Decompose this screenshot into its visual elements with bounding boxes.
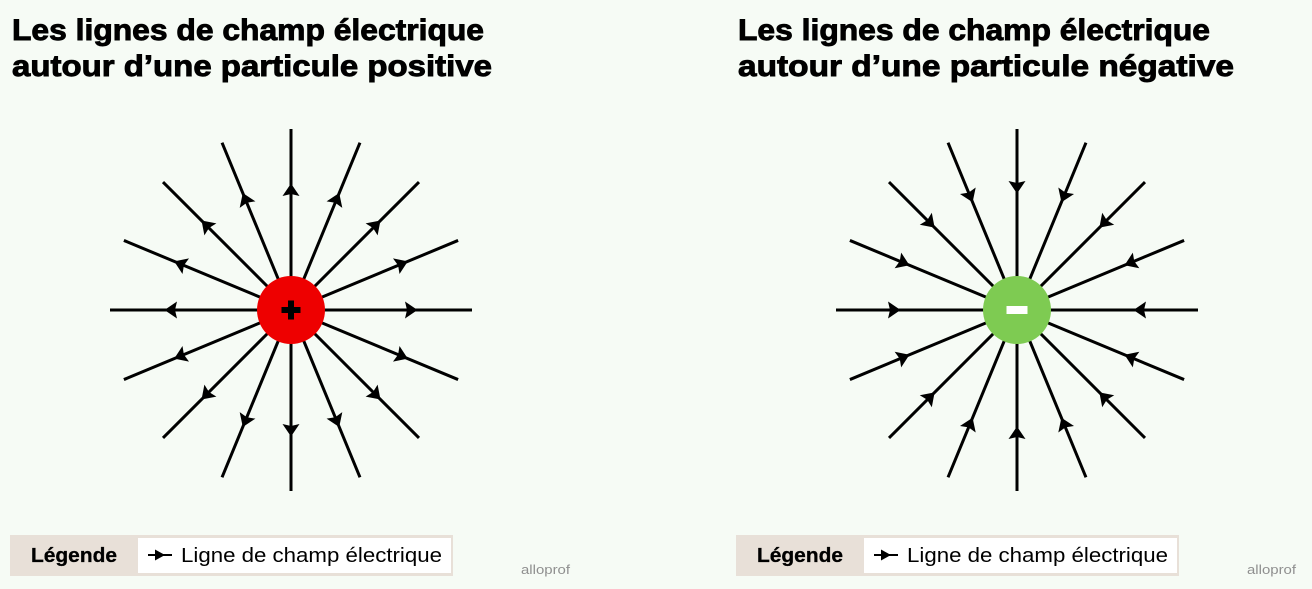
title: negative particle: Les lignes de champ électrique — [738, 14, 1210, 47]
diagram: electric field lines around a positive particle — [110, 129, 472, 491]
logo: alloprof: alloprof — [521, 562, 570, 577]
legend: positive diagram: Légende — [31, 544, 117, 567]
title: negative particle: autour d’une particule négative — [738, 50, 1234, 83]
logo: alloprof: alloprof — [1247, 562, 1296, 577]
title: positive particle — [12, 14, 492, 83]
legend: negative diagram: Ligne de champ électrique — [907, 544, 1168, 567]
title: positive particle: Les lignes de champ électrique — [12, 14, 484, 47]
positive particle — [257, 276, 325, 344]
diagram: electric field lines around a negative particle — [836, 129, 1198, 491]
negative particle — [983, 276, 1051, 344]
legend: positive diagram: Ligne de champ électrique — [181, 544, 442, 567]
title: negative particle — [738, 14, 1234, 83]
title: positive particle: autour d’une particule positive — [12, 50, 492, 83]
legend: negative diagram — [736, 535, 1179, 576]
legend: negative diagram: Légende — [757, 544, 843, 567]
legend: positive diagram — [10, 535, 453, 576]
